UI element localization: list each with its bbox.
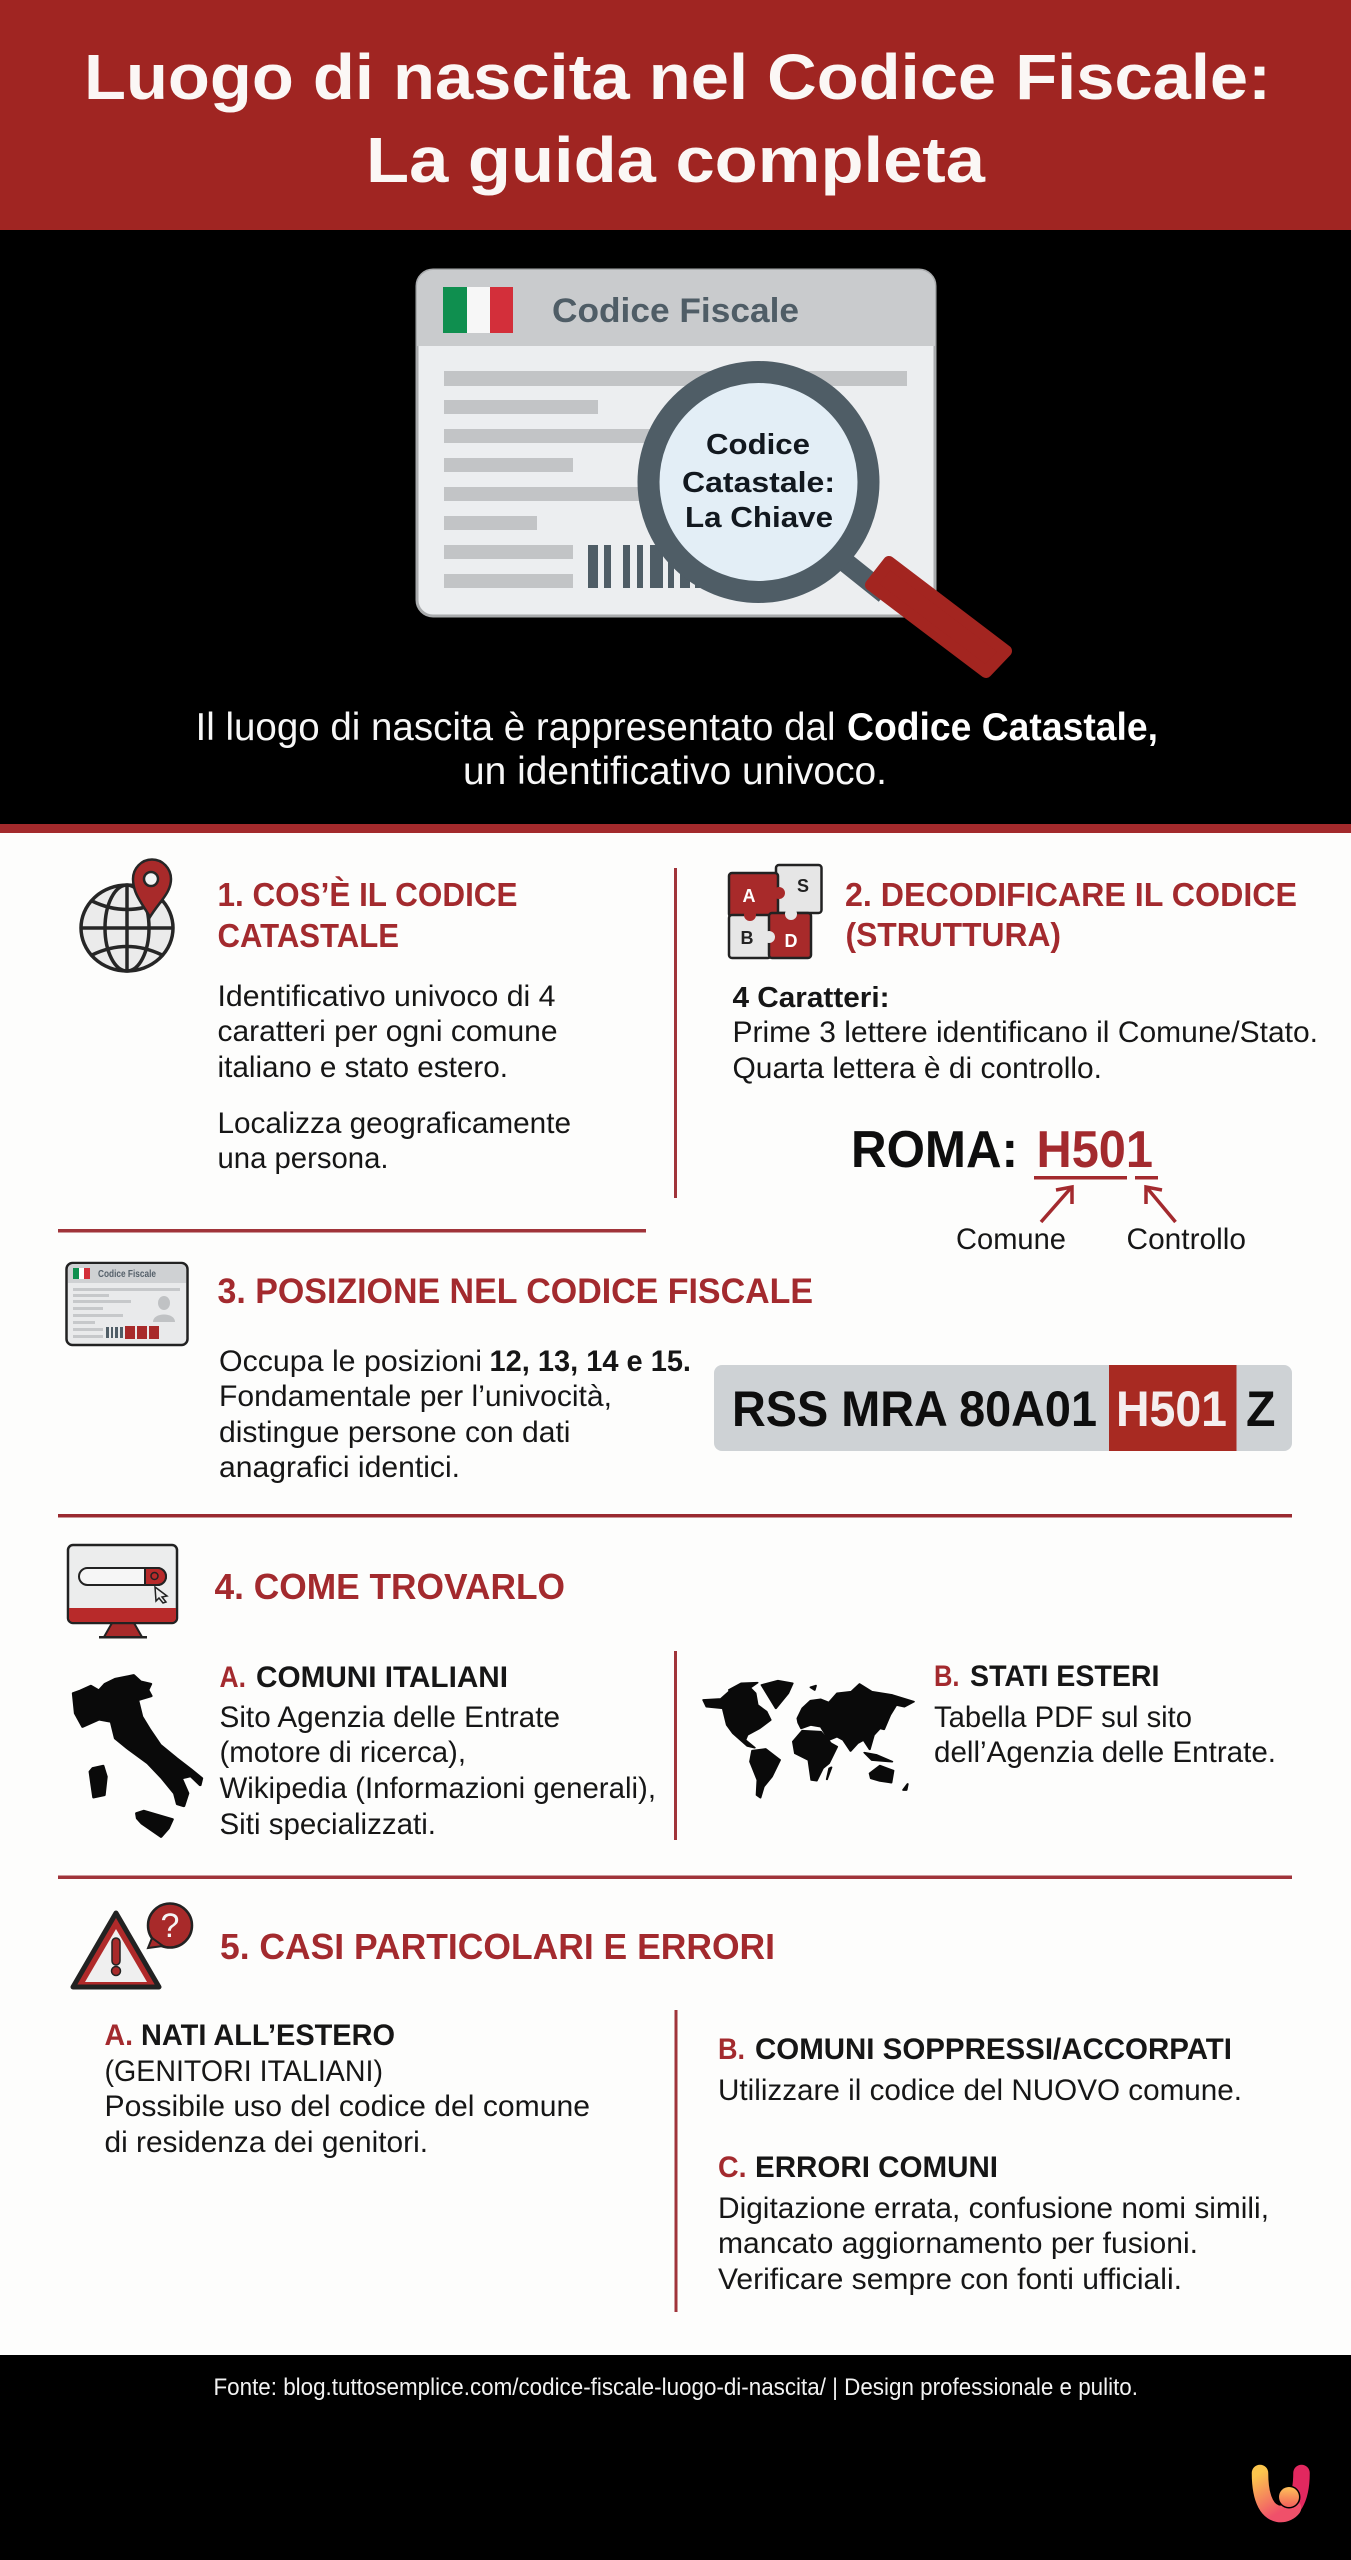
barcode: [588, 545, 700, 588]
text block: 4 Caratteri:: [732, 982, 890, 1014]
icon: warning and question: [73, 1904, 192, 1987]
arrow: controllo: [1146, 1187, 1176, 1222]
arrow: comune: [1041, 1187, 1072, 1222]
hero sentence: un identificativo univoco.: [463, 750, 887, 793]
text: stati esteri: [934, 1660, 1276, 1769]
heading: [845, 876, 1297, 953]
text: errori comuni: mancato aggiornamento per fusioni.: [718, 2227, 1198, 2260]
diagram: ROMA H501: Comune: [956, 1223, 1066, 1256]
icon: puzzle: S: [797, 876, 809, 896]
text: nati all'estero: A.: [104, 2019, 133, 2052]
text block: Localizza geograficamente: [218, 1107, 571, 1140]
text: nati all'estero: (GENITORI ITALIANI): [104, 2055, 383, 2088]
text: comuni soppressi: [718, 2033, 1242, 2107]
text block: anagrafici identici.: [219, 1451, 460, 1484]
text block: italiano e stato estero.: [218, 1051, 508, 1084]
text block: Fondamentale per l’univocità,: [219, 1380, 612, 1413]
illustration: codice fiscale card: [417, 270, 935, 616]
text: comuni italiani: COMUNI ITALIANI: [256, 1661, 508, 1694]
text block: una persona.: [218, 1142, 388, 1175]
text: comuni italiani: Siti specializzati.: [220, 1808, 436, 1841]
panel: section 4: [68, 1545, 1276, 1841]
text: nati all'estero: NATI ALL’ESTERO: [141, 2019, 395, 2052]
text: errori comuni: Digitazione errata, confusione nomi simili,: [718, 2192, 1269, 2225]
heading: 5. CASI PARTICOLARI E ERRORI: [220, 1926, 775, 1967]
code strip: RSS MRA 80A01: [732, 1381, 1097, 1437]
icon: warning and question: ?: [161, 1907, 179, 1945]
text: stati esteri: Tabella PDF sul sito: [934, 1701, 1192, 1734]
text: errori comuni: Verificare sempre con fonti ufficiali.: [718, 2263, 1182, 2296]
icon: puzzle: D: [784, 931, 798, 951]
code strip: H501: [1116, 1381, 1227, 1437]
icon: id card: Codice Fiscale: [98, 1269, 156, 1280]
panel: section 5: [73, 1904, 1269, 2296]
icon: italian flag: [443, 287, 513, 333]
icon: magnifying glass: [648, 372, 1006, 672]
hero sentence: Il luogo di nascita è rappresentato dal: [196, 706, 836, 749]
text: nati all'estero: [104, 2019, 590, 2159]
text block: [732, 982, 1318, 1085]
diagram: ROMA H501: H501: [1036, 1121, 1153, 1179]
illustration: codice fiscale card: Codice Fiscale: [552, 292, 799, 330]
hero sentence: [196, 706, 1158, 793]
icon: world map: [703, 1681, 914, 1798]
text block: distingue persone con dati: [219, 1416, 570, 1449]
text block: Identificativo univoco di 4: [218, 980, 556, 1013]
text block: Occupa le posizioni: [219, 1345, 482, 1378]
text: comuni italiani: Wikipedia (Informazioni generali),: [220, 1772, 656, 1805]
icon: puzzle: A: [742, 886, 756, 906]
icon: computer search: [68, 1545, 177, 1638]
text: stati esteri: dell’Agenzia delle Entrate.: [934, 1736, 1276, 1769]
text block: [219, 1345, 691, 1484]
text block: [218, 980, 571, 1175]
text: stati esteri: B.: [934, 1660, 960, 1693]
diagram: ROMA H501: ROMA:: [851, 1121, 1018, 1179]
panel: section 1: [81, 859, 571, 1175]
text: nati all'estero: di residenza dei genitori.: [104, 2126, 428, 2159]
title banner: [0, 0, 1351, 230]
text block: Prime 3 lettere identificano il Comune/Stato.: [732, 1016, 1318, 1049]
text: comuni italiani: A.: [220, 1661, 246, 1694]
code strip: [714, 1365, 1292, 1451]
heading: 4. COME TROVARLO: [214, 1566, 565, 1607]
icon: id card: [66, 1263, 188, 1345]
text: comuni soppressi: COMUNI SOPPRESSI/ACCORPATI: [755, 2033, 1232, 2066]
text: comuni italiani: (motore di ricerca),: [220, 1736, 466, 1769]
heading: 3. POSIZIONE NEL CODICE FISCALE: [218, 1272, 813, 1311]
text: errori comuni: C.: [718, 2151, 746, 2184]
text: comuni italiani: [220, 1661, 656, 1841]
heading: 1. COS’È IL CODICE: [218, 876, 518, 913]
panel: section 3: [66, 1263, 1292, 1484]
diagram: ROMA H501: Controllo: [1126, 1223, 1246, 1256]
icon: puzzle: [729, 865, 822, 958]
text: errori comuni: [718, 2151, 1269, 2296]
diagram: ROMA H501: [851, 1121, 1246, 1256]
hero sentence: Codice Catastale,: [847, 706, 1158, 749]
icon: puzzle: B: [740, 928, 754, 948]
panel: footer: [0, 2355, 1351, 2560]
icon: magnifying glass: Catastale:: [682, 467, 835, 499]
text: comuni soppressi: B.: [718, 2033, 745, 2066]
heading: (STRUTTURA): [846, 916, 1061, 953]
text block: caratteri per ogni comune: [218, 1015, 558, 1048]
title banner: Luogo di nascita nel Codice Fiscale:: [84, 41, 1271, 113]
heading: 2. DECODIFICARE IL CODICE: [845, 876, 1297, 913]
text: nati all'estero: Possibile uso del codice del comune: [104, 2090, 590, 2123]
heading: [218, 876, 518, 954]
icon: magnifying glass: Codice: [706, 429, 810, 461]
code strip: Z: [1246, 1381, 1276, 1437]
icon: globe with pin: [81, 859, 173, 971]
text: comuni soppressi: Utilizzare il codice del NUOVO comune.: [718, 2074, 1242, 2107]
text block: 12, 13, 14 e 15.: [490, 1345, 691, 1378]
title banner: La guida completa: [366, 124, 985, 196]
panel: hero: [0, 230, 1351, 824]
icon: map of Italy: [73, 1675, 202, 1837]
text: errori comuni: ERRORI COMUNI: [755, 2151, 998, 2184]
panel: section 2: [729, 865, 1318, 1256]
text: comuni italiani: Sito Agenzia delle Entrate: [220, 1701, 560, 1734]
heading: CATASTALE: [218, 917, 399, 954]
icon: logo: [1260, 2473, 1302, 2514]
icon: magnifying glass: La Chiave: [685, 502, 833, 534]
source text: Fonte: blog.tuttosemplice.com/codice-fiscale-luogo-di-nascita/ | Design professionale e pulito.: [214, 2374, 1138, 2401]
text block: Quarta lettera è di controllo.: [732, 1052, 1102, 1085]
text: stati esteri: STATI ESTERI: [970, 1660, 1160, 1693]
